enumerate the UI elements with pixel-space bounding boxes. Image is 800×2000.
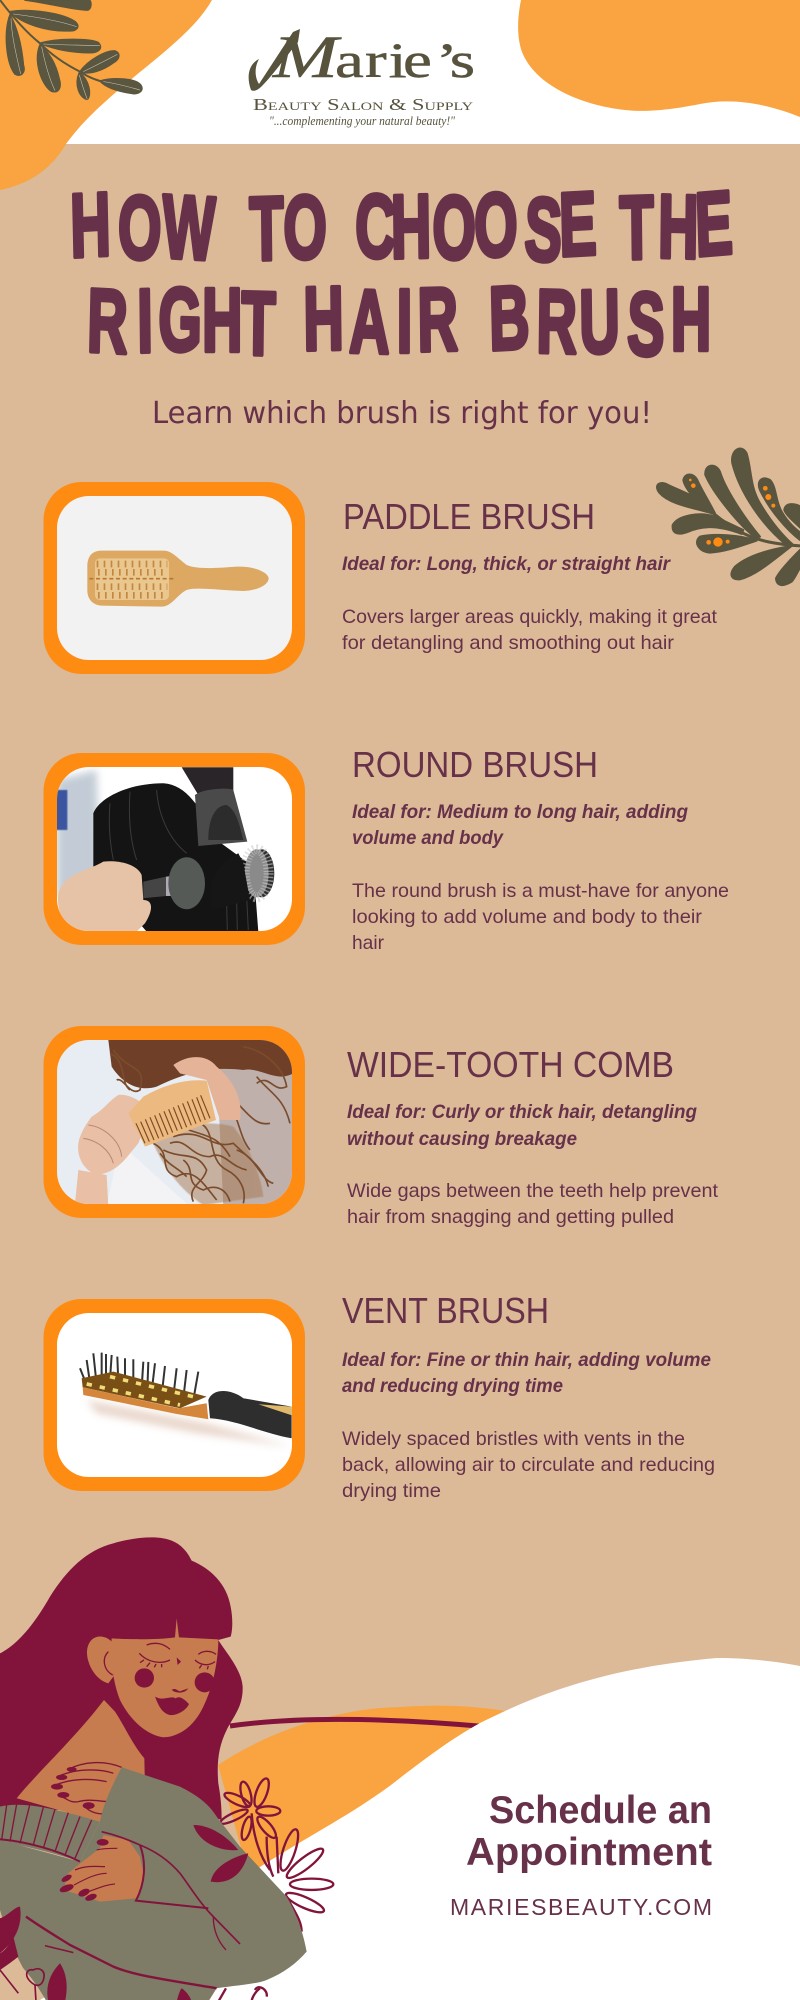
description: wide-tooth comb: hair from snagging and getting pulled <box>347 1206 674 1228</box>
facial features <box>135 1657 215 1715</box>
header band <box>0 0 800 190</box>
description: round brush: hair <box>352 932 384 954</box>
cta website: MARIESBEAUTY.COM <box>450 1894 712 1920</box>
heading: vent brush: VENT BRUSH <box>342 1290 549 1331</box>
sweater collar stripes <box>0 1804 100 1862</box>
description: paddle brush: Covers larger areas quickly, making it great <box>342 606 718 628</box>
blob: top-left orange <box>0 0 212 190</box>
ideal for: round brush: Ideal for: Medium to long hair, adding <box>352 801 688 823</box>
logo tagline: "...complementing your natural beauty!" <box>269 113 455 128</box>
ear <box>87 1637 113 1683</box>
description: vent brush: back, allowing air to circulate and reducing <box>342 1454 715 1476</box>
image frame: vent brush <box>44 1299 305 1491</box>
description: round brush: looking to add volume and body to their <box>352 906 703 928</box>
flowers <box>219 1777 333 2000</box>
logo wordmark: arie’s <box>335 32 475 88</box>
description: vent brush: Widely spaced bristles with vents in the <box>342 1428 685 1450</box>
cta heading: Appointment <box>466 1831 712 1874</box>
logo subtitle: Beauty Salon & Supply <box>253 95 473 114</box>
ideal for: wide-tooth comb: Ideal for: Curly or thick hair, detangling <box>347 1101 697 1123</box>
ideal for: paddle brush: Ideal for: Long, thick, or straight hair <box>342 553 671 575</box>
leaves on sweater <box>0 1825 248 2000</box>
ideal for: vent brush: Ideal for: Fine or thin hair, adding volume <box>342 1349 711 1371</box>
illustration: wooden paddle brush <box>87 551 269 607</box>
small flower bud <box>0 1969 44 2000</box>
cta heading: Schedule an <box>489 1789 712 1832</box>
panel: wide-tooth comb <box>44 1026 719 1228</box>
blob: footer white <box>40 1658 800 2000</box>
sweater fold lines <box>26 1832 240 2000</box>
title: HOW TO CHOOSE THE <box>69 171 734 281</box>
hand on arm <box>59 1835 144 1902</box>
description: paddle brush: for detangling and smoothing out hair <box>342 632 675 654</box>
heading: paddle brush: PADDLE BRUSH <box>343 496 595 537</box>
illustration: curly hair and wooden comb <box>75 1040 293 1207</box>
description: wide-tooth comb: Wide gaps between the teeth help prevent <box>347 1180 719 1202</box>
hand on shoulder <box>51 1763 122 1817</box>
panel: round brush <box>44 744 729 954</box>
ideal for: round brush: volume and body <box>352 827 504 849</box>
logo wordmark: M <box>272 24 342 91</box>
panel: paddle brush <box>44 482 718 674</box>
heading: round brush: ROUND BRUSH <box>352 744 598 785</box>
image frame: round brush <box>44 753 305 945</box>
illustration: blow-drying with a round brush <box>56 767 274 932</box>
ideal for: vent brush: and reducing drying time <box>342 1375 563 1397</box>
hair <box>0 1537 243 1820</box>
illustration: woman with long hair and flowers <box>0 1537 333 2000</box>
logo: Marie's Beauty Salon & Supply <box>249 24 475 128</box>
illustration: vent brush with black handle <box>80 1353 292 1447</box>
footer shapes <box>40 1658 800 2000</box>
description: round brush: The round brush is a must-have for anyone <box>352 880 729 902</box>
subtitle: Learn which brush is right for you! <box>152 396 652 431</box>
description: vent brush: drying time <box>342 1480 441 1502</box>
icon: top-left olive branch <box>0 0 142 99</box>
logo swash <box>249 29 300 91</box>
icon: right olive branch with orange dots <box>657 449 800 585</box>
title: RIGHT HAIR BRUSH <box>86 266 711 375</box>
image frame: wide-tooth comb <box>44 1026 305 1218</box>
panel: vent brush <box>44 1290 715 1502</box>
image frame: paddle brush <box>44 482 305 674</box>
face <box>111 1618 218 1737</box>
title <box>69 171 734 375</box>
blob: footer orange <box>218 1706 520 1880</box>
shoulder <box>17 1700 145 1822</box>
call to action <box>450 1789 712 1920</box>
sweater <box>0 1767 307 2000</box>
ideal for: wide-tooth comb: without causing breakage <box>347 1128 577 1150</box>
heading: wide-tooth comb: WIDE-TOOTH COMB <box>347 1044 674 1085</box>
decorative stem line <box>230 1719 490 1727</box>
blob: top-right orange <box>518 0 800 117</box>
